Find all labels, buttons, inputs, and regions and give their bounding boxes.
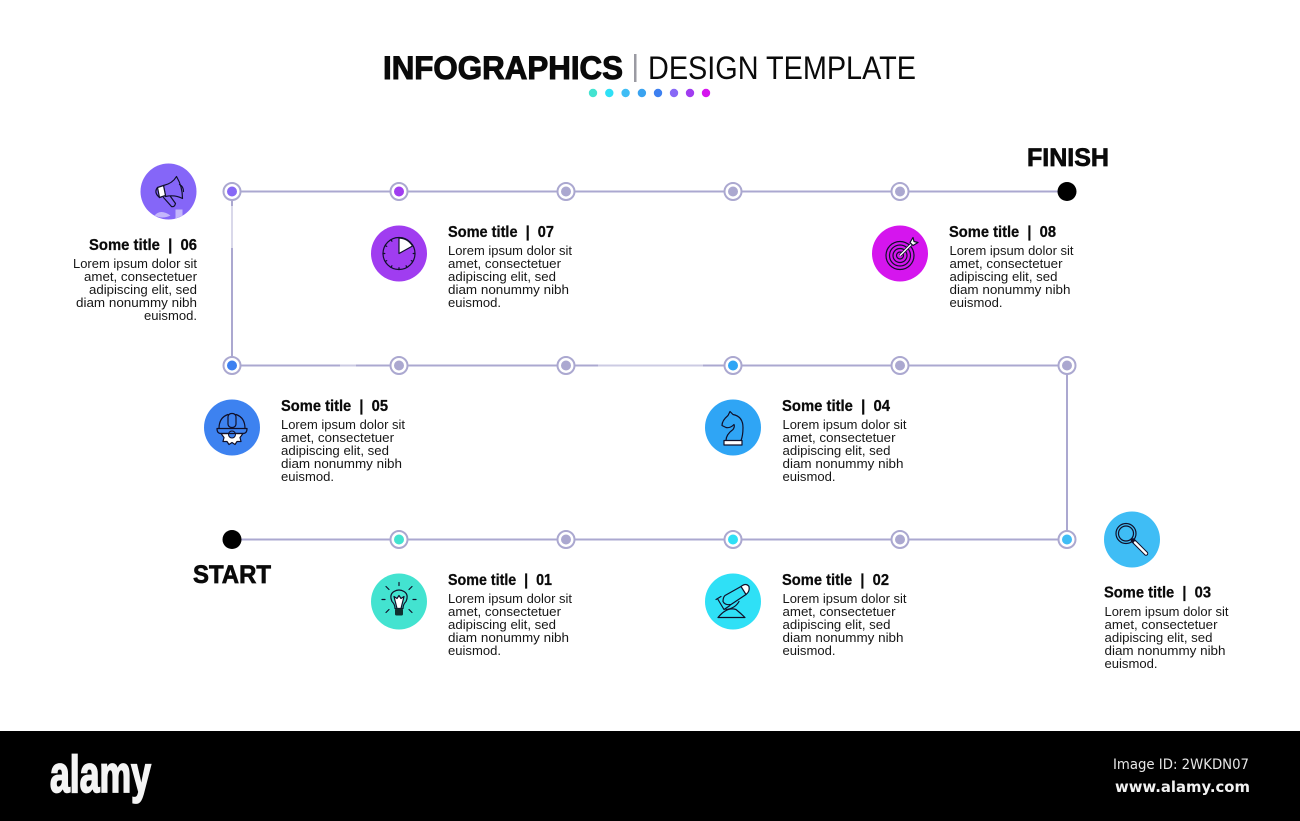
text block: Some title | 02: [782, 572, 889, 589]
timeline path: [230, 192, 1067, 540]
step 07: [371, 224, 572, 310]
step 02: [705, 572, 907, 658]
text block: diam nonummy nibh: [448, 282, 569, 297]
text block: amet, consectetuer: [281, 430, 395, 445]
start marker: START: [193, 561, 271, 589]
text block: diam nonummy nibh: [281, 456, 402, 471]
text block: Some title | 07: [448, 224, 554, 241]
icon: chess knight: [705, 400, 761, 456]
text block: Lorem ipsum dolor sit: [950, 243, 1074, 258]
text block: adipiscing elit, sed: [1104, 630, 1212, 645]
text block: [1104, 584, 1229, 671]
finish marker: FINISH: [1027, 144, 1109, 172]
text block: adipiscing elit, sed: [782, 443, 890, 458]
title: INFOGRAPHICS: [383, 50, 623, 86]
image id: Image ID: 2WKDN07: [1113, 757, 1249, 773]
icon: microscope: [705, 574, 761, 630]
text block: [782, 572, 907, 658]
text block: euismod.: [144, 308, 197, 323]
step 03: [1104, 512, 1229, 671]
text block: diam nonummy nibh: [448, 630, 569, 645]
text block: [949, 224, 1074, 310]
text block: adipiscing elit, sed: [448, 617, 556, 632]
icon: clock: [371, 226, 427, 282]
finish marker: [1027, 144, 1109, 201]
step 05: [204, 398, 405, 484]
text block: Some title | 04: [782, 398, 890, 415]
step 08: [872, 224, 1074, 310]
text block: [281, 398, 405, 484]
text block: euismod.: [950, 295, 1002, 310]
text block: euismod.: [448, 643, 501, 658]
start marker: [193, 530, 271, 589]
icon: target with dart: [872, 226, 928, 282]
text block: Lorem ipsum dolor sit: [281, 417, 405, 432]
text block: amet, consectetuer: [1104, 617, 1218, 632]
timeline node centres: [227, 186, 1072, 544]
text block: diam nonummy nibh: [782, 630, 904, 645]
title colour dots: [589, 89, 710, 97]
text block: Lorem ipsum dolor sit: [782, 417, 907, 432]
text block: Lorem ipsum dolor sit: [73, 256, 197, 271]
timeline nodes: [224, 183, 1076, 548]
step 06: [73, 164, 198, 323]
text block: amet, consectetuer: [950, 256, 1063, 271]
text block: euismod.: [448, 295, 501, 310]
text block: amet, consectetuer: [448, 604, 562, 619]
text block: diam nonummy nibh: [782, 456, 904, 471]
text block: adipiscing elit, sed: [782, 617, 890, 632]
text block: Some title | 08: [949, 224, 1056, 241]
text block: euismod.: [782, 469, 836, 484]
text block: [73, 237, 198, 323]
alamy logo: alamy: [50, 746, 151, 804]
icon: magnifying glass: [1104, 512, 1160, 568]
icon: megaphone: [140, 164, 196, 220]
text block: Lorem ipsum dolor sit: [1104, 604, 1229, 619]
text block: adipiscing elit, sed: [89, 282, 197, 297]
text block: adipiscing elit, sed: [448, 269, 556, 284]
text block: Some title | 01: [448, 572, 552, 589]
footer bar: [0, 731, 1300, 821]
step 04: [705, 398, 907, 484]
text block: amet, consectetuer: [84, 269, 198, 284]
text block: diam nonummy nibh: [76, 295, 197, 310]
website: www.alamy.com: [1115, 778, 1250, 796]
text block: amet, consectetuer: [782, 430, 896, 445]
text block: Lorem ipsum dolor sit: [448, 243, 572, 258]
text block: Some title | 06: [89, 237, 197, 254]
text block: Some title | 05: [281, 398, 388, 415]
title: [383, 50, 916, 86]
text block: [448, 572, 572, 658]
icon: light bulb: [371, 574, 427, 630]
text block: diam nonummy nibh: [1104, 643, 1226, 658]
text block: amet, consectetuer: [448, 256, 562, 271]
text block: [782, 398, 907, 484]
step 01: [371, 572, 572, 658]
text block: adipiscing elit, sed: [281, 443, 389, 458]
text block: Lorem ipsum dolor sit: [448, 591, 572, 606]
text block: diam nonummy nibh: [950, 282, 1070, 297]
text block: euismod.: [1104, 656, 1158, 671]
text block: euismod.: [782, 643, 836, 658]
text block: [448, 224, 572, 310]
text block: euismod.: [281, 469, 334, 484]
text block: amet, consectetuer: [782, 604, 896, 619]
icon: helmet with gear: [204, 400, 260, 456]
title: DESIGN TEMPLATE: [648, 50, 916, 86]
text block: adipiscing elit, sed: [950, 269, 1058, 284]
text block: Some title | 03: [1104, 584, 1211, 602]
text block: Lorem ipsum dolor sit: [782, 591, 907, 606]
